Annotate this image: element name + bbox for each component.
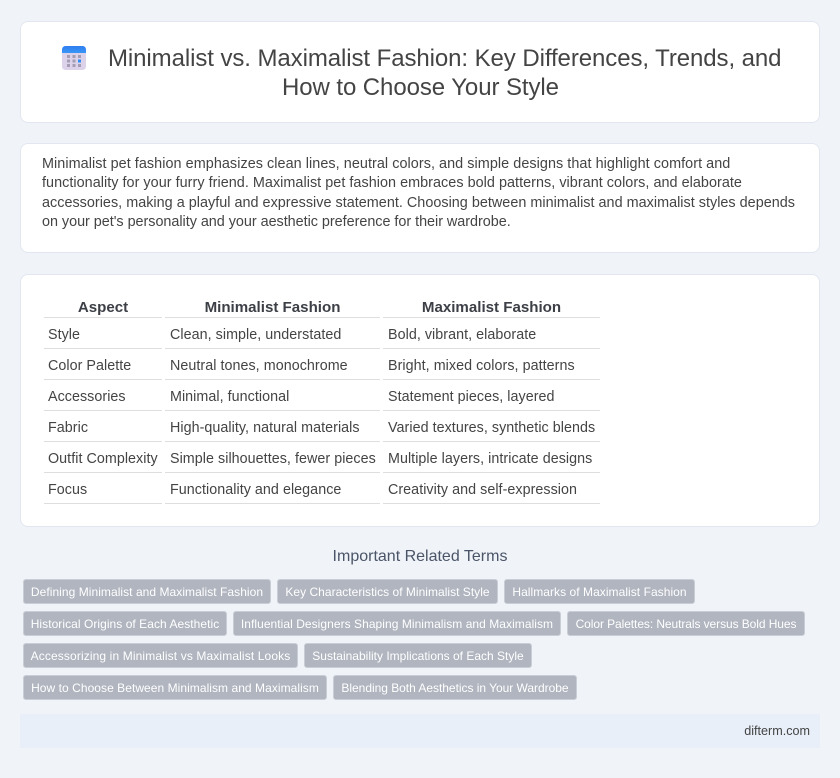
table: comparison: Style — [48, 327, 80, 343]
table: comparison: Minimal, functional — [170, 389, 289, 405]
text block: introduction: Minimalist pet fashion emphasizes clean lines, neutral colors, and simple designs that highlight comfort and — [42, 156, 730, 172]
tag list: related terms: Sustainability Implications of Each Style — [312, 649, 524, 663]
table: comparison: Neutral tones, monochrome — [170, 358, 348, 374]
panel: comparison table — [20, 274, 820, 527]
heading: important related terms: Important Related Terms — [333, 548, 507, 565]
panel: introduction — [20, 143, 820, 253]
title: How to Choose Your Style — [282, 74, 559, 101]
tag list: related terms: Influential Designers Shaping Minimalism and Maximalism — [241, 617, 553, 631]
table: comparison: Varied textures, synthetic blends — [388, 420, 595, 436]
text block: introduction: accessories, making a playful and expressive statement. Choosing between minimalist and maximalist styles depends — [42, 194, 795, 210]
table: comparison: Outfit Complexity — [48, 451, 158, 467]
tag list: related terms: Key Characteristics of Minimalist Style — [285, 585, 490, 599]
icon: calendar — [62, 46, 86, 70]
tag list: related terms: Hallmarks of Maximalist Fashion — [512, 585, 687, 599]
table: comparison: Aspect — [78, 299, 128, 316]
tag list: related terms: Defining Minimalist and Maximalist Fashion — [31, 585, 263, 599]
table: comparison: Functionality and elegance — [170, 482, 341, 498]
table: comparison: High-quality, natural materials — [170, 420, 360, 436]
table: comparison: Fabric — [48, 420, 88, 436]
tag list: related terms: Accessorizing in Minimalist vs Maximalist Looks — [31, 649, 290, 663]
table: comparison: Focus — [48, 482, 87, 498]
panel: header — [20, 21, 820, 123]
table: comparison: Creativity and self-expression — [388, 482, 577, 498]
table: comparison: Bold, vibrant, elaborate — [388, 327, 536, 343]
tag list: related terms: Color Palettes: Neutrals versus Bold Hues — [576, 617, 796, 631]
table: comparison: Accessories — [48, 389, 126, 405]
footer text: site name: difterm.com — [744, 724, 810, 738]
tag list: related terms: Historical Origins of Each Aesthetic — [31, 617, 219, 631]
title: Minimalist vs. Maximalist Fashion: Key Differences, Trends, and — [108, 45, 781, 72]
footer — [20, 714, 820, 748]
tag list: related terms: Blending Both Aesthetics in Your Wardrobe — [341, 681, 569, 695]
table: comparison: Multiple layers, intricate designs — [388, 451, 592, 467]
tag list: related terms: How to Choose Between Minimalism and Maximalism — [31, 681, 319, 695]
text block: introduction: on your pet's personality and your aesthetic preference for their wardrobe. — [42, 214, 511, 230]
table: comparison: Simple silhouettes, fewer pieces — [170, 451, 376, 467]
table: comparison: Clean, simple, understated — [170, 327, 341, 343]
title — [108, 45, 781, 101]
table: comparison: Statement pieces, layered — [388, 389, 555, 405]
text block: introduction — [42, 156, 795, 230]
table: comparison: Bright, mixed colors, patterns — [388, 358, 575, 374]
table: comparison — [44, 299, 600, 504]
text block: introduction: functionality for your furry friend. Maximalist pet fashion embraces bold patterns, vibrant colors, and elaborate — [42, 174, 742, 190]
tag list: related terms — [23, 579, 805, 700]
table: comparison: Minimalist Fashion — [205, 299, 340, 316]
table: comparison: Color Palette — [48, 358, 131, 374]
table: comparison: Maximalist Fashion — [422, 299, 561, 316]
